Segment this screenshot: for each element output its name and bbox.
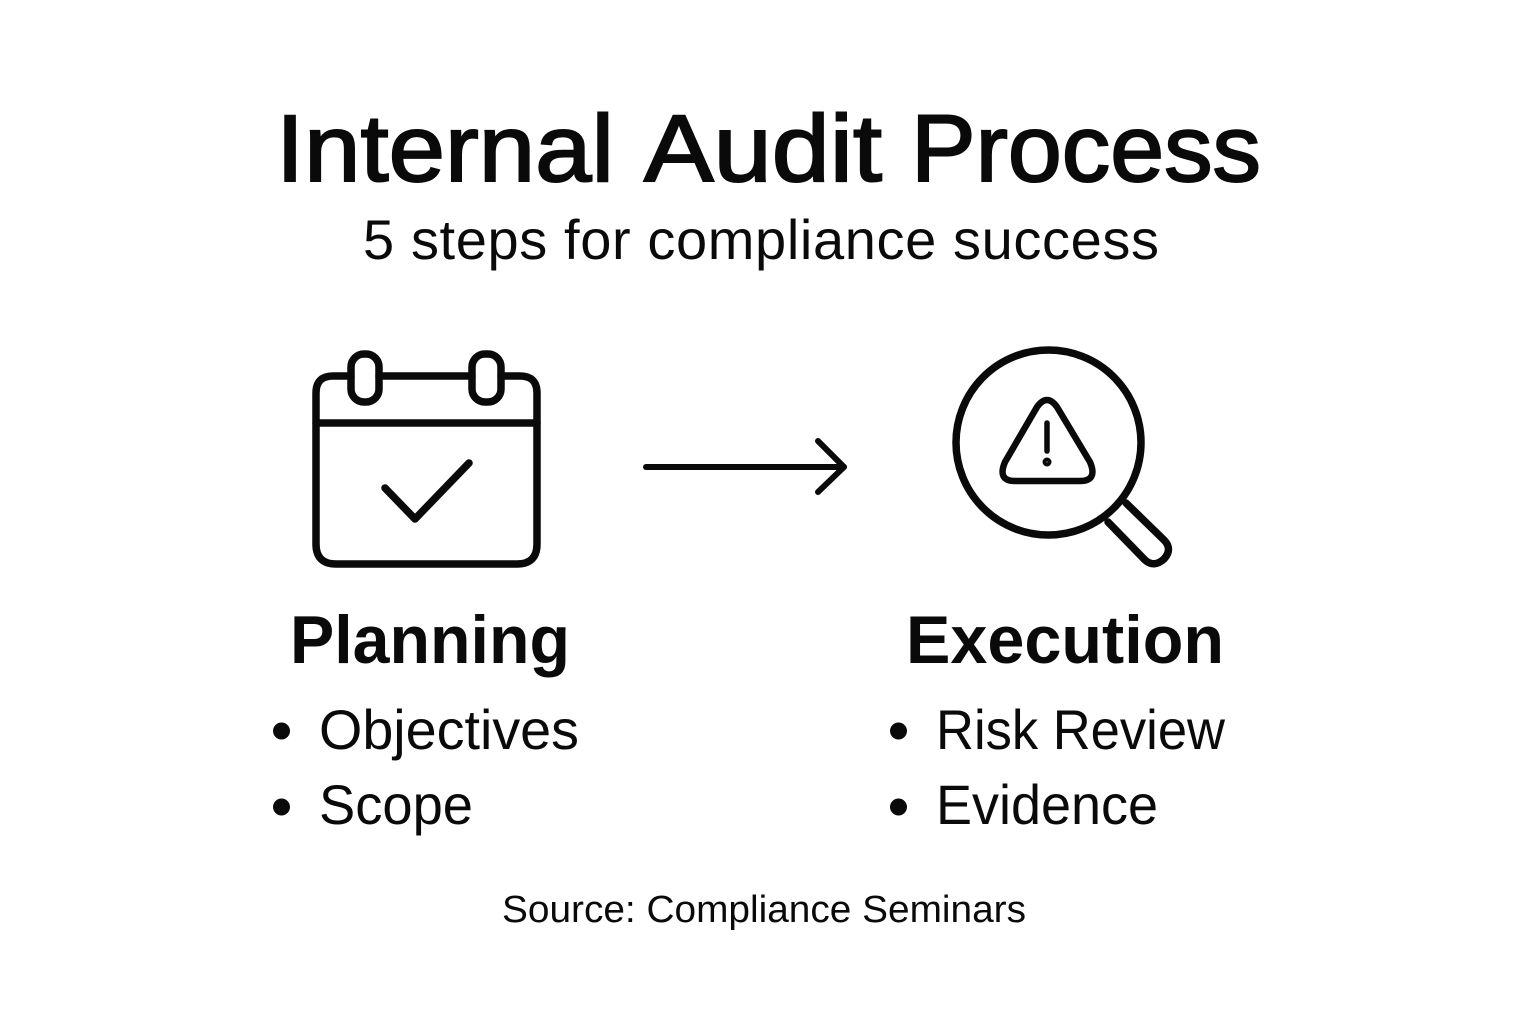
heading: planning: Planning xyxy=(290,602,570,678)
subtitle: 5 steps for compliance success xyxy=(363,208,1159,271)
heading: execution: Execution xyxy=(906,602,1224,678)
title: Audit xyxy=(644,96,882,202)
title: Internal xyxy=(276,96,614,202)
execution list: Evidence xyxy=(936,773,1158,836)
icon: magnifying glass with warning xyxy=(956,350,1168,564)
title xyxy=(276,96,1261,202)
arrow: planning to execution xyxy=(646,441,844,492)
source note: Source: Compliance Seminars xyxy=(502,889,1026,931)
execution list: Risk Review xyxy=(936,698,1226,761)
icon: calendar with check xyxy=(316,354,537,564)
title: Process xyxy=(911,96,1261,202)
planning list: Objectives xyxy=(319,698,579,761)
planning list xyxy=(273,698,579,836)
planning list: Scope xyxy=(319,773,473,836)
execution list xyxy=(890,698,1226,836)
